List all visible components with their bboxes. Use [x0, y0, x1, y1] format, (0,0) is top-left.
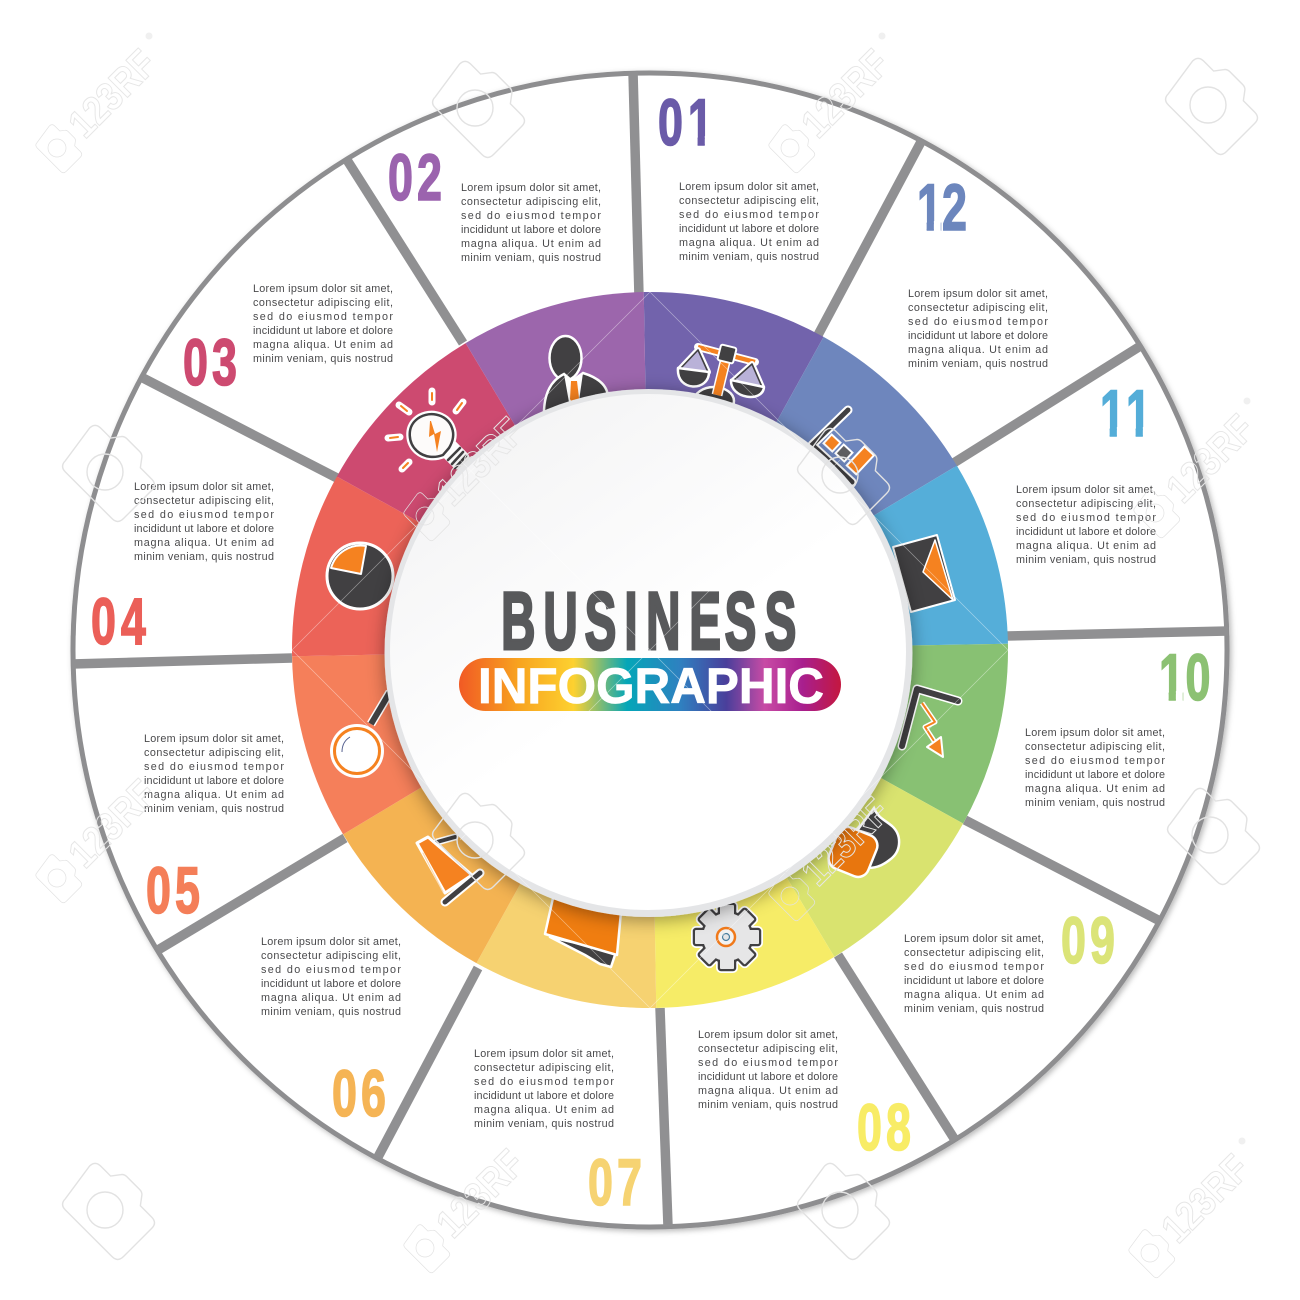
text block 02: consectetur adipiscing elit, — [461, 196, 601, 208]
text block 07: incididunt ut labore et dolore — [474, 1090, 614, 1102]
watermark overlay: 123RF — [60, 42, 165, 146]
segment 04 — [292, 476, 650, 656]
text block 05: incididunt ut labore et dolore — [144, 775, 284, 787]
text block 01 — [679, 181, 819, 263]
text block 09: incididunt ut labore et dolore — [904, 975, 1044, 987]
text block 08: sed do eiusmod tempor — [698, 1057, 838, 1069]
watermark overlay: 123RF — [428, 1142, 533, 1246]
text block 04: incididunt ut labore et dolore — [134, 523, 274, 535]
text block 12: minim veniam, quis nostrud — [908, 358, 1048, 370]
text block 01: incididunt ut labore et dolore — [679, 223, 819, 235]
text block 08: incididunt ut labore et dolore — [698, 1071, 838, 1083]
text block 06: minim veniam, quis nostrud — [261, 1006, 401, 1018]
text block 04: magna aliqua. Ut enim ad — [134, 537, 274, 549]
text block 02: incididunt ut labore et dolore — [461, 224, 601, 236]
segment 05 — [292, 650, 650, 834]
number 05: 05 — [146, 853, 200, 927]
text block 11: incididunt ut labore et dolore — [1016, 526, 1156, 538]
text block 09: minim veniam, quis nostrud — [904, 1003, 1044, 1015]
icon: envelope — [893, 535, 955, 612]
centre disc — [384, 389, 912, 917]
title: INFOGRAPHIC pill: INFOGRAPHIC — [478, 658, 824, 714]
text block 01: consectetur adipiscing elit, — [679, 195, 819, 207]
icon: businessman — [544, 336, 608, 420]
text block 10: magna aliqua. Ut enim ad — [1025, 783, 1165, 795]
text block 05: minim veniam, quis nostrud — [144, 803, 284, 815]
number 11: 11 — [1100, 376, 1151, 450]
watermark overlay: 123RF — [793, 42, 898, 146]
text block 01: minim veniam, quis nostrud — [679, 251, 819, 263]
text block 10: Lorem ipsum dolor sit amet, — [1025, 727, 1165, 739]
icon: gear — [695, 905, 759, 969]
text block 10: sed do eiusmod tempor — [1025, 755, 1165, 767]
text block 03: magna aliqua. Ut enim ad — [253, 339, 393, 351]
text block 09: sed do eiusmod tempor — [904, 961, 1044, 973]
icon: falling line chart — [902, 689, 958, 757]
text block 07: minim veniam, quis nostrud — [474, 1118, 614, 1130]
text block 09: consectetur adipiscing elit, — [904, 947, 1044, 959]
watermark overlay: 123RF — [428, 410, 533, 514]
text block 07: Lorem ipsum dolor sit amet, — [474, 1048, 614, 1060]
text block 01: sed do eiusmod tempor — [679, 209, 819, 221]
icon: light bulb — [388, 391, 466, 469]
text block 05: consectetur adipiscing elit, — [144, 747, 284, 759]
text block 11: Lorem ipsum dolor sit amet, — [1016, 484, 1156, 496]
text block 02 — [461, 182, 601, 264]
segment 02 — [466, 292, 650, 650]
icon: megaphone — [417, 837, 480, 902]
text block 08: magna aliqua. Ut enim ad — [698, 1085, 838, 1097]
number 12: 12 — [917, 170, 967, 244]
text block 08: minim veniam, quis nostrud — [698, 1099, 838, 1111]
text block 08 — [698, 1029, 838, 1111]
icon: magnifying glass — [330, 692, 390, 778]
text block 05 — [144, 733, 284, 815]
text block 04: Lorem ipsum dolor sit amet, — [134, 481, 274, 493]
watermark overlay: 123RF — [1158, 407, 1263, 511]
text block 07: magna aliqua. Ut enim ad — [474, 1104, 614, 1116]
number 10: 10 — [1159, 640, 1210, 714]
number 08: 08 — [857, 1090, 911, 1164]
text block 11: consectetur adipiscing elit, — [1016, 498, 1156, 510]
text block 11: magna aliqua. Ut enim ad — [1016, 540, 1156, 552]
number 01: 01 — [658, 85, 713, 159]
watermark overlay: 123RF — [60, 772, 165, 876]
segment 10 — [650, 644, 1008, 824]
text block 06 — [261, 936, 401, 1018]
text block 12: sed do eiusmod tempor — [908, 316, 1048, 328]
text block 08: consectetur adipiscing elit, — [698, 1043, 838, 1055]
text block 07: sed do eiusmod tempor — [474, 1076, 614, 1088]
icon: speech bubbles — [825, 808, 899, 880]
text block 06: incididunt ut labore et dolore — [261, 978, 401, 990]
watermark overlay: 123RF — [1153, 1147, 1258, 1251]
text block 03: incididunt ut labore et dolore — [253, 325, 393, 337]
icon: pie chart — [327, 543, 393, 609]
outer wheel: rim and spokes — [72, 72, 1228, 1227]
text block 05: Lorem ipsum dolor sit amet, — [144, 733, 284, 745]
watermark overlay: 123RF — [793, 790, 898, 894]
segment 09 — [650, 650, 963, 957]
text block 12: consectetur adipiscing elit, — [908, 302, 1048, 314]
text block 06: magna aliqua. Ut enim ad — [261, 992, 401, 1004]
text block 02: sed do eiusmod tempor — [461, 210, 601, 222]
icon: bar chart — [812, 410, 874, 482]
text block 04 — [134, 481, 274, 563]
text block 09: magna aliqua. Ut enim ad — [904, 989, 1044, 1001]
segment 03 — [337, 343, 650, 650]
text block 04: sed do eiusmod tempor — [134, 509, 274, 521]
text block 01: Lorem ipsum dolor sit amet, — [679, 181, 819, 193]
text block 04: minim veniam, quis nostrud — [134, 551, 274, 563]
segment 06 — [343, 650, 650, 963]
icon: balance scales — [678, 344, 764, 415]
number 03: 03 — [183, 325, 237, 399]
text block 02: minim veniam, quis nostrud — [461, 252, 601, 264]
text block 03: consectetur adipiscing elit, — [253, 297, 393, 309]
text block 05: sed do eiusmod tempor — [144, 761, 284, 773]
text block 04: consectetur adipiscing elit, — [134, 495, 274, 507]
number 04: 04 — [91, 584, 146, 658]
segment 01 — [644, 292, 824, 650]
text block 03: Lorem ipsum dolor sit amet, — [253, 283, 393, 295]
text block 12: incididunt ut labore et dolore — [908, 330, 1048, 342]
text block 11: minim veniam, quis nostrud — [1016, 554, 1156, 566]
text block 06: Lorem ipsum dolor sit amet, — [261, 936, 401, 948]
text block 12: Lorem ipsum dolor sit amet, — [908, 288, 1048, 300]
text block 11: sed do eiusmod tempor — [1016, 512, 1156, 524]
text block 09: Lorem ipsum dolor sit amet, — [904, 933, 1044, 945]
text block 03: minim veniam, quis nostrud — [253, 353, 393, 365]
text block 10: consectetur adipiscing elit, — [1025, 741, 1165, 753]
text block 03 — [253, 283, 393, 365]
text block 11 — [1016, 484, 1156, 566]
text block 02: Lorem ipsum dolor sit amet, — [461, 182, 601, 194]
text block 07: consectetur adipiscing elit, — [474, 1062, 614, 1074]
text block 10: minim veniam, quis nostrud — [1025, 797, 1165, 809]
text block 03: sed do eiusmod tempor — [253, 311, 393, 323]
number 06: 06 — [332, 1056, 386, 1130]
number 07: 07 — [588, 1145, 642, 1219]
text block 06: sed do eiusmod tempor — [261, 964, 401, 976]
text block 12: magna aliqua. Ut enim ad — [908, 344, 1048, 356]
icon: book — [545, 898, 621, 967]
text block 10 — [1025, 727, 1165, 809]
coloured segment ring — [292, 292, 1008, 1008]
number 09: 09 — [1061, 903, 1115, 977]
segment 12 — [650, 337, 957, 650]
text block 07 — [474, 1048, 614, 1130]
segment 07 — [476, 650, 656, 1008]
title: BUSINESS: BUSINESS — [501, 576, 796, 667]
segment 08 — [650, 650, 834, 1008]
text block 10: incididunt ut labore et dolore — [1025, 769, 1165, 781]
text block 06: consectetur adipiscing elit, — [261, 950, 401, 962]
text block 08: Lorem ipsum dolor sit amet, — [698, 1029, 838, 1041]
text block 09 — [904, 933, 1044, 1015]
segment 11 — [650, 466, 1008, 650]
text block 02: magna aliqua. Ut enim ad — [461, 238, 601, 250]
number 02: 02 — [388, 140, 442, 214]
text block 01: magna aliqua. Ut enim ad — [679, 237, 819, 249]
text block 12 — [908, 288, 1048, 370]
text block 05: magna aliqua. Ut enim ad — [144, 789, 284, 801]
